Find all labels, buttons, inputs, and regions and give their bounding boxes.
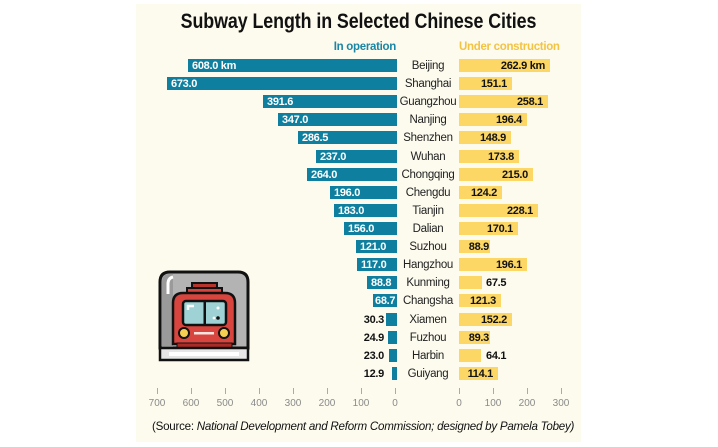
city labels: Nanjing: [410, 114, 446, 126]
axis: under construction: 100: [485, 398, 501, 409]
bar chart: in operation: 183.0: [338, 205, 364, 217]
bar chart: under construction: 114.1: [468, 368, 493, 380]
heading: in operation: In operation: [334, 41, 396, 53]
city labels: Kunming: [406, 277, 450, 289]
city labels: Shanghai: [405, 78, 451, 90]
city labels: Wuhan: [411, 151, 445, 163]
bar chart: under construction: 124.2: [471, 187, 497, 199]
bar chart: under construction: 258.1: [517, 96, 543, 108]
source note: (Source: National Development and Reform Commission; designed by Pamela Tobey): [152, 420, 574, 433]
bar chart: under construction: 67.5: [486, 277, 506, 289]
outside bar values: 12.9: [364, 368, 384, 380]
bar chart: in operation: 347.0: [282, 114, 308, 126]
bar chart: under construction: 121.3: [470, 295, 496, 307]
city labels: Fuzhou: [410, 332, 446, 344]
city labels: Chongqing: [402, 169, 454, 181]
outside bar values: 23.0: [364, 350, 384, 362]
city labels: Changsha: [403, 295, 453, 307]
icon: subway train: [158, 270, 250, 362]
heading: under construction: Under construction: [459, 41, 560, 53]
bar chart: under construction: 88.9: [469, 241, 489, 253]
bar chart: under construction: 64.1: [486, 350, 506, 362]
title: Subway Length in Selected Chinese Cities: [181, 10, 536, 33]
bar chart: in operation: 68.7: [375, 295, 395, 307]
city labels: Guiyang: [408, 368, 448, 380]
bar chart: under construction: 262.9 km: [501, 60, 545, 72]
city labels: Guangzhou: [400, 96, 456, 108]
city labels: Suzhou: [409, 241, 447, 253]
city labels: Tianjin: [412, 205, 444, 217]
city labels: [400, 60, 456, 380]
axis: in operation: 400: [251, 398, 267, 409]
bar chart: under construction: 89.3: [469, 332, 489, 344]
bar chart: in operation: 237.0: [320, 151, 346, 163]
background panel: [136, 4, 581, 442]
bar chart: in operation: 264.0: [311, 169, 337, 181]
bar chart: under construction: 170.1: [487, 223, 513, 235]
axis: in operation: 300: [285, 398, 301, 409]
bar chart: in operation: 88.8: [371, 277, 391, 289]
bar chart: under construction: [459, 59, 550, 380]
bar chart: under construction: 215.0: [502, 169, 528, 181]
axis: under construction: 200: [519, 398, 535, 409]
bar chart: under construction: 151.1: [481, 78, 507, 90]
city labels: Dalian: [413, 223, 443, 235]
bar chart: in operation: [167, 59, 397, 380]
bar chart: in operation: 196.0: [334, 187, 360, 199]
axis: in operation: 100: [353, 398, 369, 409]
outside bar values: [364, 314, 384, 380]
axis: under construction: [456, 388, 569, 409]
city labels: Shenzhen: [403, 132, 453, 144]
bar chart: under construction: 152.2: [481, 314, 507, 326]
city labels: Xiamen: [409, 314, 447, 326]
bar chart: in operation: 117.0: [361, 259, 386, 271]
bar chart: in operation: 286.5: [302, 132, 328, 144]
bar chart: in operation: 673.0: [171, 78, 197, 90]
bar chart: in operation: 608.0 km: [192, 60, 236, 72]
bar chart: under construction: 173.8: [488, 151, 514, 163]
city labels: Chengdu: [406, 187, 450, 199]
city labels: Beijing: [412, 60, 444, 72]
axis: in operation: 0: [392, 398, 398, 409]
bar chart: under construction: 196.4: [496, 114, 522, 126]
outside bar values: 24.9: [364, 332, 384, 344]
city labels: Hangzhou: [403, 259, 453, 271]
bar chart: under construction: 228.1: [507, 205, 533, 217]
axis: in operation: 700: [149, 398, 165, 409]
bar chart: under construction: 148.9: [480, 132, 506, 144]
bar chart: under construction: 196.1: [496, 259, 522, 271]
axis: in operation: 500: [217, 398, 233, 409]
bar chart: in operation: 121.0: [360, 241, 386, 253]
axis: in operation: 600: [183, 398, 199, 409]
city labels: Harbin: [412, 350, 444, 362]
axis: in operation: [149, 388, 398, 409]
outside bar values: 30.3: [364, 314, 384, 326]
axis: under construction: 300: [553, 398, 569, 409]
bar chart: in operation: 391.6: [267, 96, 293, 108]
bar chart: in operation: 156.0: [348, 223, 374, 235]
axis: in operation: 200: [319, 398, 335, 409]
axis: under construction: 0: [456, 398, 462, 409]
